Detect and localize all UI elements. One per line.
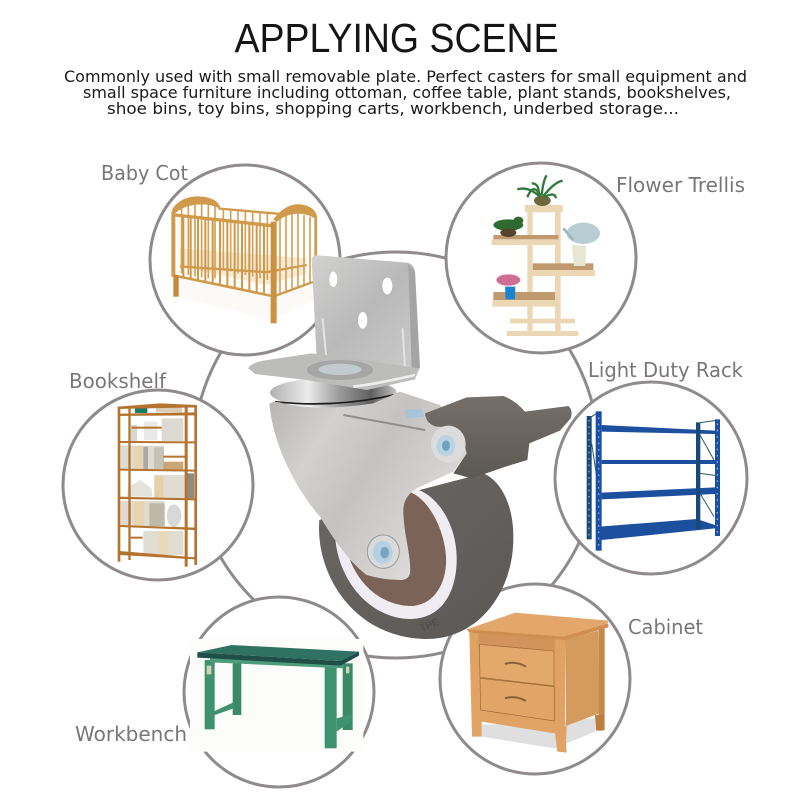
pivot bolt (431, 426, 466, 462)
brake lever (425, 396, 572, 478)
panel: bookshelf (63, 390, 253, 580)
description text: shoe bins, toy bins, shopping carts, workbench, underbed storage... (107, 99, 679, 118)
panel: baby cot (150, 165, 340, 355)
label: bookshelf: Bookshelf (69, 369, 167, 393)
label: flower trellis: Flower Trellis (616, 173, 745, 197)
wheel tyre (319, 473, 513, 639)
fork (269, 392, 467, 580)
panel: cabinet (440, 584, 630, 774)
plants (493, 175, 600, 299)
caster wheel (248, 255, 572, 639)
white ring and brown hub (335, 488, 457, 619)
description text: Commonly used with small removable plate. Perfect casters for small equipment and (64, 67, 747, 86)
label: cabinet: Cabinet (628, 615, 703, 639)
panel: light duty rack (555, 382, 747, 574)
title: APPLYING SCENE (234, 15, 558, 61)
label: baby cot: Baby Cot (101, 161, 188, 185)
label: light duty rack: Light Duty Rack (588, 358, 743, 382)
label: workbench: Workbench (75, 722, 187, 746)
central connecting ring (193, 252, 599, 658)
description text (64, 67, 747, 118)
description text: small space furniture including ottoman, coffee table, plant stands, bookshelves, (83, 83, 731, 102)
wheel markings: TPE (419, 617, 441, 634)
panel: flower trellis (446, 163, 636, 353)
panel: workbench (184, 597, 374, 787)
swivel plate (248, 255, 420, 408)
